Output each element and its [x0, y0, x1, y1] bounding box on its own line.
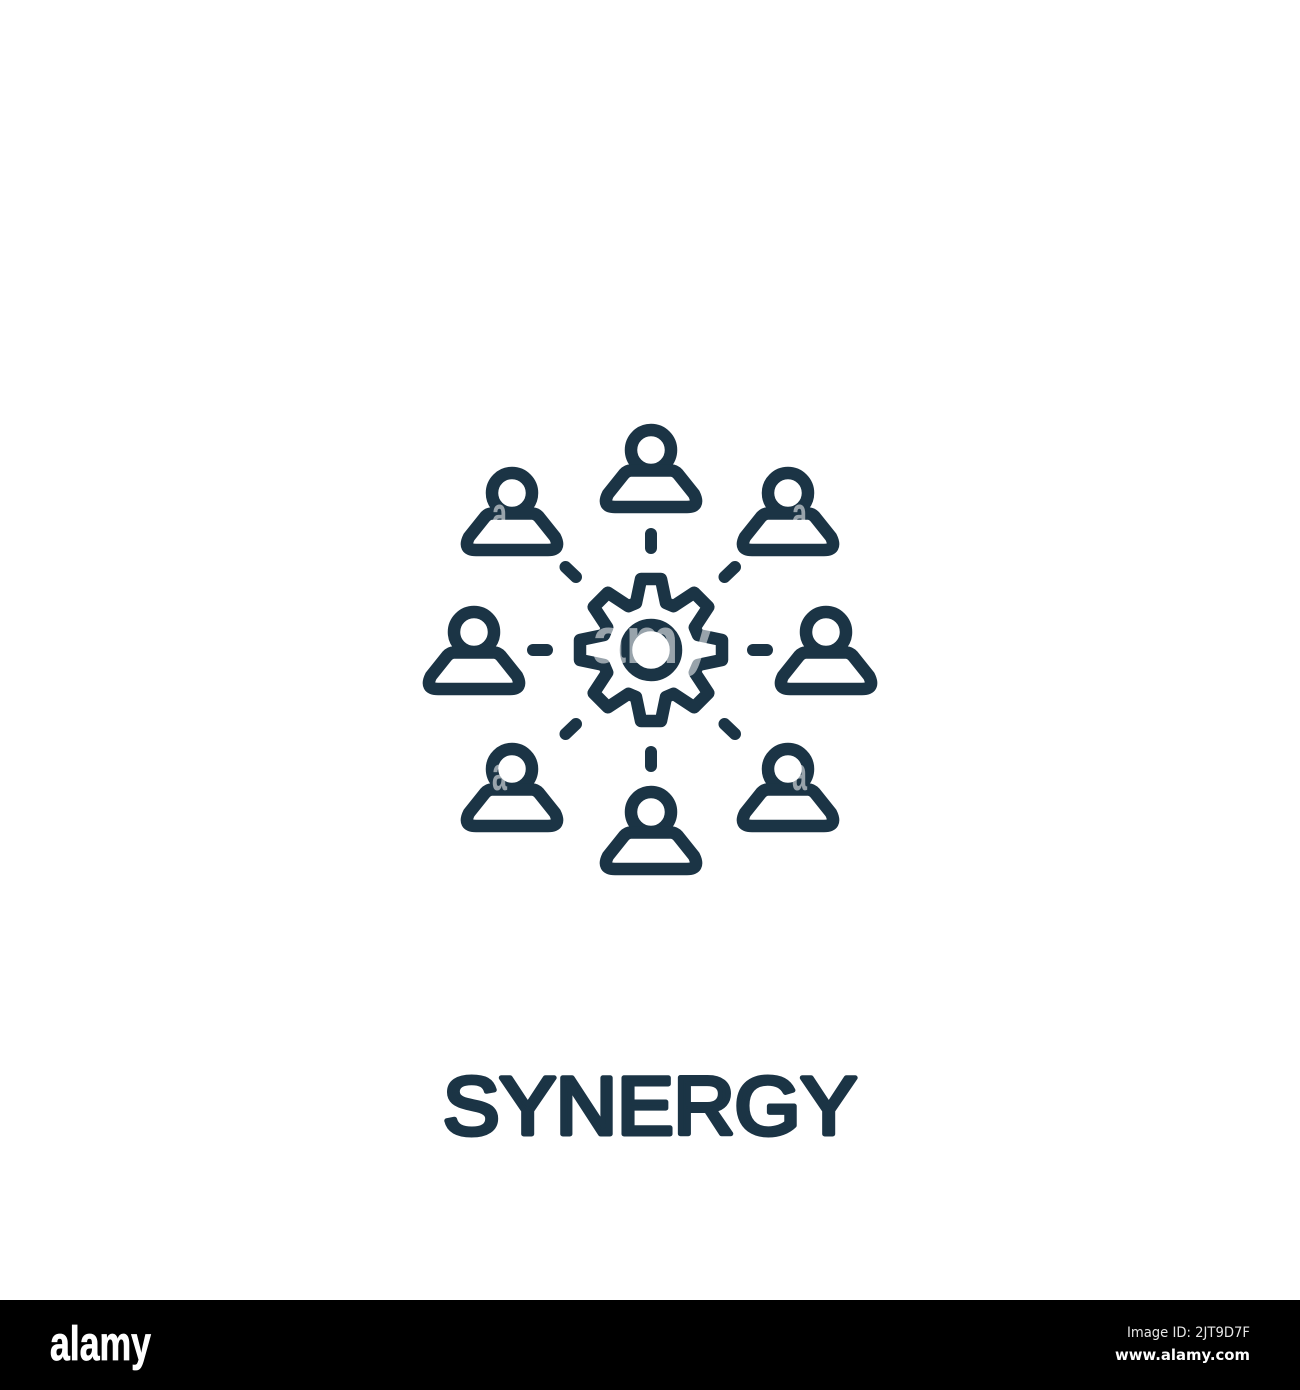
watermark fragments: a	[792, 487, 807, 540]
watermark fragments: a	[492, 487, 507, 540]
icon: person lower right	[743, 749, 833, 826]
icon: person left	[429, 612, 519, 689]
image id: Image ID: 2JT9D7F	[1127, 1325, 1250, 1341]
icon: person bottom	[606, 792, 696, 869]
synergy icon	[429, 430, 871, 869]
icon: central gear	[580, 579, 722, 721]
icon: person upper left	[467, 473, 557, 550]
watermark fragments: a	[492, 747, 507, 800]
icon: person lower left	[467, 749, 557, 826]
title: SYNERGY	[443, 1061, 857, 1152]
watermark fragments: a	[792, 747, 807, 800]
logo: alamy	[50, 1318, 151, 1371]
icon: person top	[606, 430, 696, 507]
watermark fragments: amy	[592, 603, 712, 677]
icon: person right	[781, 612, 871, 689]
watermark fragments	[492, 487, 807, 800]
icon: person upper right	[743, 473, 833, 550]
footer bar	[0, 1300, 1300, 1390]
connector dashes	[533, 534, 767, 766]
website: www.alamy.com	[1115, 1346, 1250, 1364]
